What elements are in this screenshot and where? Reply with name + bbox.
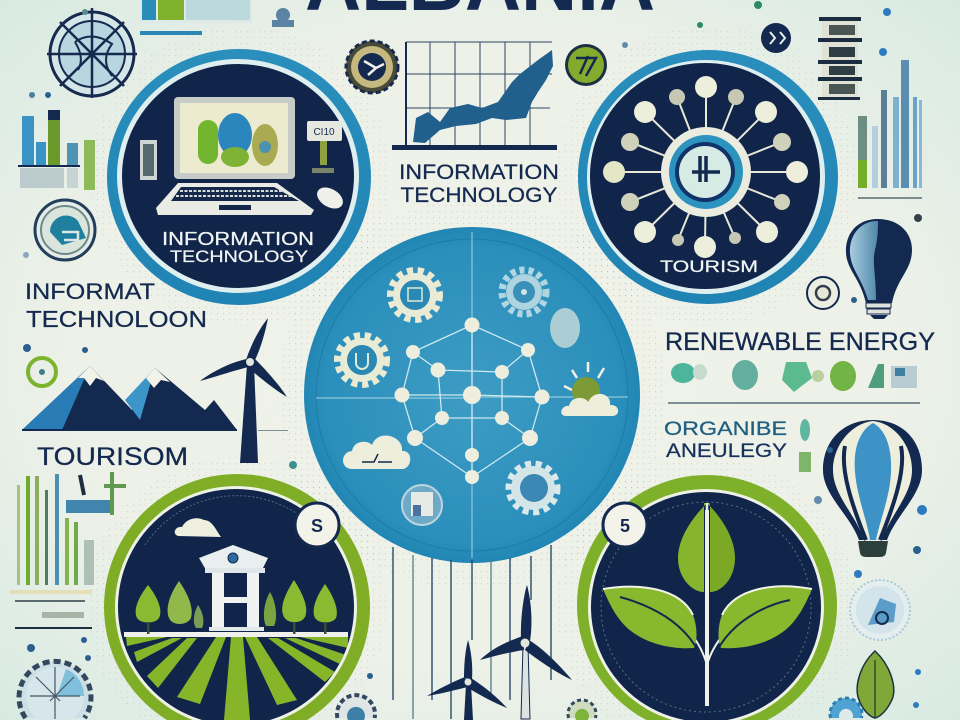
icon: wind turbine small bbox=[427, 640, 507, 720]
bar chart: top left bbox=[18, 110, 95, 190]
icon: gear bottom-right bbox=[509, 464, 557, 512]
icon: small ornament bbox=[272, 8, 294, 27]
icon: number badge: S bbox=[311, 516, 323, 536]
row of colourful icons bbox=[671, 360, 917, 392]
ground line bbox=[124, 632, 348, 637]
heading: information technology: INFORMATION bbox=[162, 229, 314, 249]
icon: mouse bbox=[313, 183, 347, 213]
heading: organic agriculture: ANEULEGY bbox=[666, 441, 787, 462]
icon: top chart card bbox=[140, 0, 252, 35]
icon: blue-green badge bbox=[35, 200, 95, 260]
network lines bbox=[402, 325, 542, 477]
network spokes bbox=[614, 87, 797, 247]
icon: small gear near turbines bbox=[568, 700, 596, 720]
heading: renewable energy: RENEWABLE ENERGY bbox=[665, 328, 935, 356]
icon: gear bottom-centre bbox=[337, 695, 375, 720]
heading: organic agriculture bbox=[664, 419, 787, 462]
heading: information technology left: INFORMAT bbox=[25, 279, 155, 304]
icon: green badge bbox=[565, 44, 607, 86]
icon: gear top-right bbox=[502, 270, 546, 314]
heading: organic agriculture: ORGANIBE bbox=[664, 419, 787, 440]
icon: sun and cloud bbox=[561, 362, 618, 416]
heading: tourism: TOURISM bbox=[660, 257, 758, 276]
heading: information technology: TECHNOLOGY bbox=[170, 247, 308, 266]
icon: top-left compass wheel bbox=[47, 8, 137, 98]
icon: hot air balloon bbox=[823, 420, 922, 557]
field stripes bbox=[126, 637, 348, 720]
panel: tourism circle bbox=[578, 50, 838, 304]
panel: agriculture circle bbox=[104, 474, 370, 720]
panel: central hub circle bbox=[304, 227, 640, 563]
heading: information technology centre bbox=[399, 161, 559, 207]
icon: mountains bbox=[22, 366, 237, 431]
heading: information technology left bbox=[25, 279, 207, 332]
icon: plant stem bbox=[628, 510, 785, 706]
dotted caption line bbox=[668, 402, 920, 404]
icon: classical gate bbox=[199, 545, 268, 631]
icon: small ring bbox=[807, 277, 839, 309]
stippled halo bbox=[87, 26, 857, 720]
icon: wind turbine bbox=[200, 318, 288, 463]
network nodes bbox=[603, 76, 808, 258]
heading: tourism left: TOURISOM bbox=[37, 443, 188, 471]
heading: information technology centre: TECHNOLOGY bbox=[400, 184, 558, 207]
icon: laptop bbox=[156, 97, 314, 215]
icon: gear top-left bbox=[391, 271, 439, 319]
icon: green leaf bbox=[857, 651, 894, 718]
icon: sign bbox=[307, 121, 342, 173]
icon: number badge bbox=[603, 503, 647, 547]
bar chart: top right bbox=[858, 60, 922, 199]
icon: light bulb bbox=[846, 219, 912, 319]
line chart with map bbox=[392, 42, 557, 150]
icon: gear left bbox=[338, 336, 386, 384]
panel: organic agriculture circle bbox=[577, 475, 837, 720]
icon: blue seal bbox=[850, 580, 910, 640]
heading: information technology left: TECHNOLOON bbox=[26, 306, 207, 332]
icon: cloud with symbol bbox=[343, 435, 410, 469]
icon: window badge bbox=[402, 485, 442, 525]
icon: phone bbox=[140, 140, 157, 180]
network nodes bbox=[394, 318, 550, 484]
icon: small green figure bbox=[799, 419, 811, 472]
icon: number badge: 5 bbox=[620, 516, 630, 536]
icon: number badge bbox=[295, 503, 339, 547]
heading: information technology centre: INFORMATION bbox=[399, 161, 559, 184]
icon: dark speech badge bbox=[761, 23, 791, 53]
panel: information technology circle bbox=[107, 49, 371, 305]
icon: small green badge bbox=[28, 358, 56, 386]
icon: top leaf bbox=[678, 503, 735, 592]
icon: trees bbox=[136, 580, 337, 634]
icon: cloud bbox=[175, 518, 221, 537]
icon: right leaf bbox=[715, 586, 812, 655]
decorative vertical lines bbox=[393, 545, 551, 719]
icon: sign: CI10 bbox=[313, 127, 335, 138]
icon: wind turbine large bbox=[480, 585, 572, 719]
icon: stacked server tower bbox=[818, 17, 862, 100]
icon: blue gear bottom-right bbox=[830, 698, 862, 720]
icon: gear bottom-left bbox=[19, 661, 91, 720]
icon: left leaf bbox=[603, 587, 700, 655]
bar chart: bottom left bbox=[10, 472, 126, 629]
icon: clock gear bbox=[346, 41, 398, 93]
heading: information technology bbox=[162, 229, 314, 266]
icon: faint leaf emblem bbox=[550, 308, 580, 348]
icon: hub with cross bbox=[661, 127, 751, 217]
